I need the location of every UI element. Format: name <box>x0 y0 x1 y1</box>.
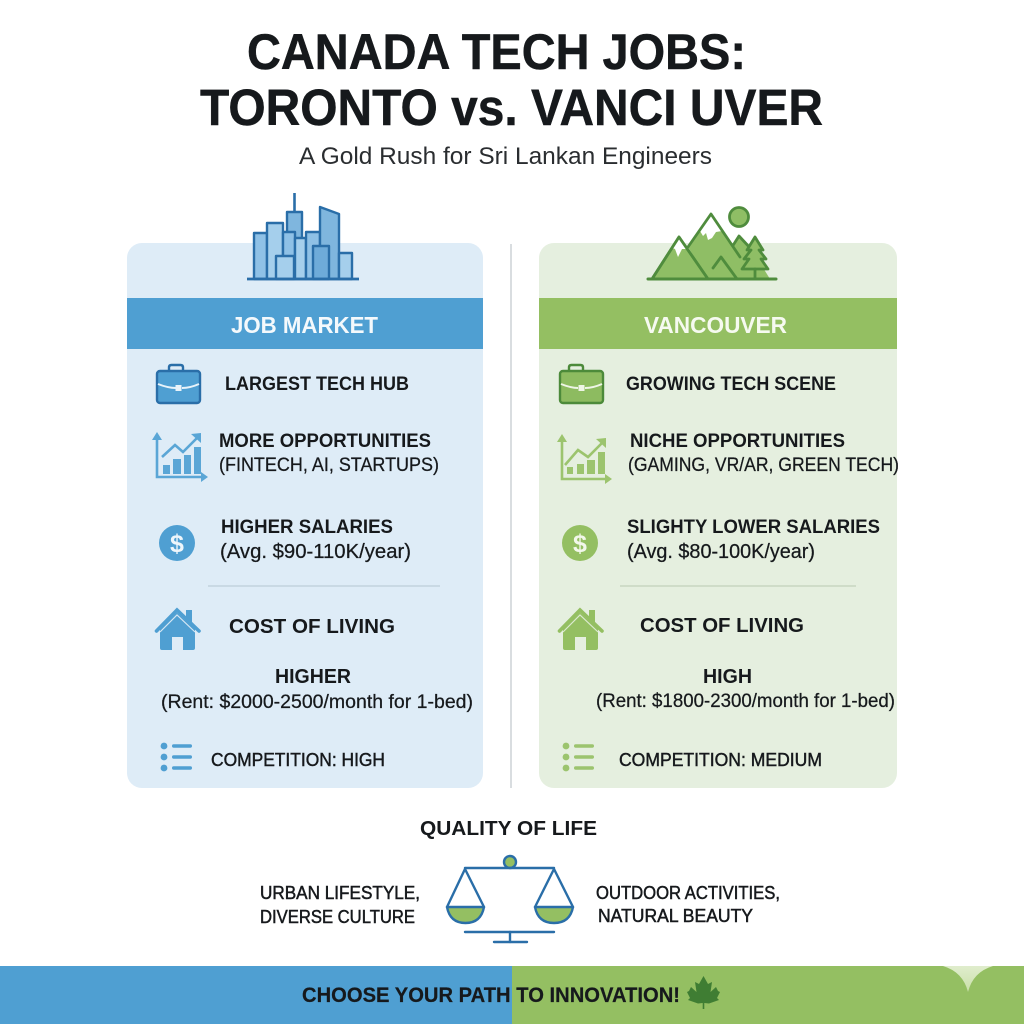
icon: dollar coin: $ <box>573 530 587 558</box>
header band: Vancouver <box>539 298 897 349</box>
text: higher salaries <box>220 516 411 563</box>
footer call to action: CHOOSE YOUR PATH TO INNOVATION! <box>302 984 680 1007</box>
icon: house <box>156 610 199 650</box>
text: higher rent: (Rent: $2000-2500/month for 1-bed) <box>161 692 473 713</box>
text: higher salaries: (Avg. $90-110K/year) <box>220 541 411 563</box>
text: urban lifestyle <box>260 883 420 927</box>
text: high rent <box>596 666 895 712</box>
text: cost of living: COST OF LIVING <box>229 615 395 638</box>
text: niche opportunities: NICHE OPPORTUNITIES <box>630 430 845 452</box>
header band: Vancouver: VANCOUVER <box>644 312 787 338</box>
icon: dollar coin <box>159 525 195 561</box>
footer banner <box>0 966 1024 1024</box>
title <box>200 24 823 136</box>
header band: job market: JOB MARKET <box>231 312 378 338</box>
text: more opportunities: MORE OPPORTUNITIES <box>219 430 431 452</box>
subtitle: A Gold Rush for Sri Lankan Engineers <box>299 143 712 170</box>
heading: quality of life: QUALITY OF LIFE <box>420 817 597 840</box>
icon: dollar coin <box>562 525 598 561</box>
text: high rent: (Rent: $1800-2300/month for 1-bed) <box>596 691 895 712</box>
title: CANADA TECH JOBS: <box>247 24 746 80</box>
text: high rent: HIGH <box>703 666 752 688</box>
icon: briefcase <box>560 365 603 403</box>
header band: job market <box>127 298 483 349</box>
section: quality of life <box>260 817 780 942</box>
text: more opportunities <box>219 430 439 476</box>
icon: dollar coin: $ <box>170 530 184 558</box>
icon: growth chart <box>557 434 612 484</box>
icon: balance scale <box>447 856 573 942</box>
icon: growth chart <box>152 432 208 482</box>
text: urban lifestyle: DIVERSE CULTURE <box>260 907 415 927</box>
icon: list <box>161 743 192 771</box>
icon: list <box>563 743 594 771</box>
text: cost of living: COST OF LIVING <box>640 614 804 637</box>
icon: city skyline <box>247 193 359 279</box>
icon: briefcase <box>157 365 200 403</box>
text: higher salaries: HIGHER SALARIES <box>221 516 393 538</box>
text: competition high: COMPETITION: HIGH <box>211 750 385 770</box>
icon: maple leaf <box>687 976 720 1009</box>
text: slightly lower salaries: (Avg. $80-100K/year) <box>627 541 815 563</box>
icon: house <box>560 610 602 650</box>
text: outdoor activities <box>596 883 780 926</box>
text: niche opportunities: (GAMING, VR/AR, GREEN TECH) <box>628 455 899 476</box>
text: outdoor activities: NATURAL BEAUTY <box>598 906 753 926</box>
text: slightly lower salaries: SLIGHTY LOWER SALARIES <box>627 516 880 538</box>
text: more opportunities: (FINTECH, AI, STARTUPS) <box>219 455 439 476</box>
panel: Toronto job market <box>127 193 483 788</box>
text: higher rent: HIGHER <box>275 666 352 688</box>
text: slightly lower salaries <box>627 516 880 563</box>
panel: Vancouver <box>539 208 899 788</box>
icon: mountains, sun and tree <box>648 208 776 279</box>
title: TORONTO vs. VANCI UVER <box>200 79 823 136</box>
text: largest tech hub: LARGEST TECH HUB <box>225 373 409 395</box>
text: outdoor activities: OUTDOOR ACTIVITIES, <box>596 883 780 903</box>
text: growing tech scene: GROWING TECH SCENE <box>626 373 836 395</box>
text: urban lifestyle: URBAN LIFESTYLE, <box>260 883 420 903</box>
text: niche opportunities <box>628 430 899 476</box>
text: competition medium: COMPETITION: MEDIUM <box>619 750 822 770</box>
text: higher rent <box>161 666 473 713</box>
